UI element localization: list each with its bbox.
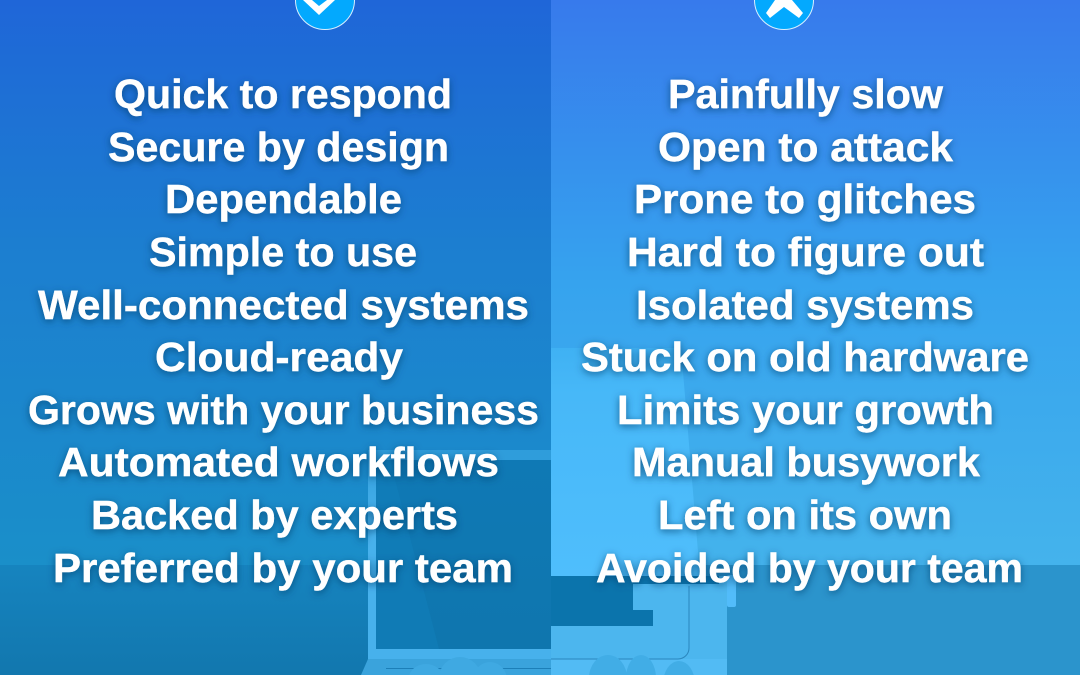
text block: benefits list: Secure by design [108, 124, 449, 170]
text block: drawbacks list: Limits your growth [617, 387, 994, 433]
text block: benefits list: Simple to use [149, 229, 417, 275]
illustration: desk and device on the right panel [551, 348, 736, 675]
text block: benefits list: Dependable [165, 176, 402, 222]
text block: drawbacks list: Hard to figure out [627, 229, 984, 275]
text block: drawbacks list: Prone to glitches [634, 176, 976, 222]
text block: drawbacks list: Stuck on old hardware [581, 334, 1029, 380]
panel: left background [0, 0, 551, 675]
text block: drawbacks list: Isolated systems [636, 282, 974, 328]
text block: benefits list: Quick to respond [114, 71, 452, 117]
illustration: laptop on the left panel [361, 450, 551, 675]
panel: right background [551, 0, 1080, 675]
text block: benefits list: Backed by experts [91, 492, 458, 538]
text block: drawbacks list: Manual busywork [632, 439, 980, 485]
text block: benefits list: Preferred by your team [53, 545, 513, 591]
text block: benefits list [28, 71, 539, 591]
text block: benefits list: Cloud-ready [155, 334, 403, 380]
text block: drawbacks list: Avoided by your team [596, 545, 1023, 591]
text block: benefits list: Automated workflows [58, 439, 499, 485]
text block: drawbacks list: Open to attack [658, 124, 953, 170]
text block: drawbacks list [581, 71, 1029, 591]
text block: benefits list: Well-connected systems [38, 282, 529, 328]
icon: check badge [296, 0, 354, 30]
icon: cross badge [754, 0, 814, 30]
text block: benefits list: Grows with your business [28, 387, 539, 433]
text block: drawbacks list: Painfully slow [668, 71, 943, 117]
text block: drawbacks list: Left on its own [658, 492, 952, 538]
